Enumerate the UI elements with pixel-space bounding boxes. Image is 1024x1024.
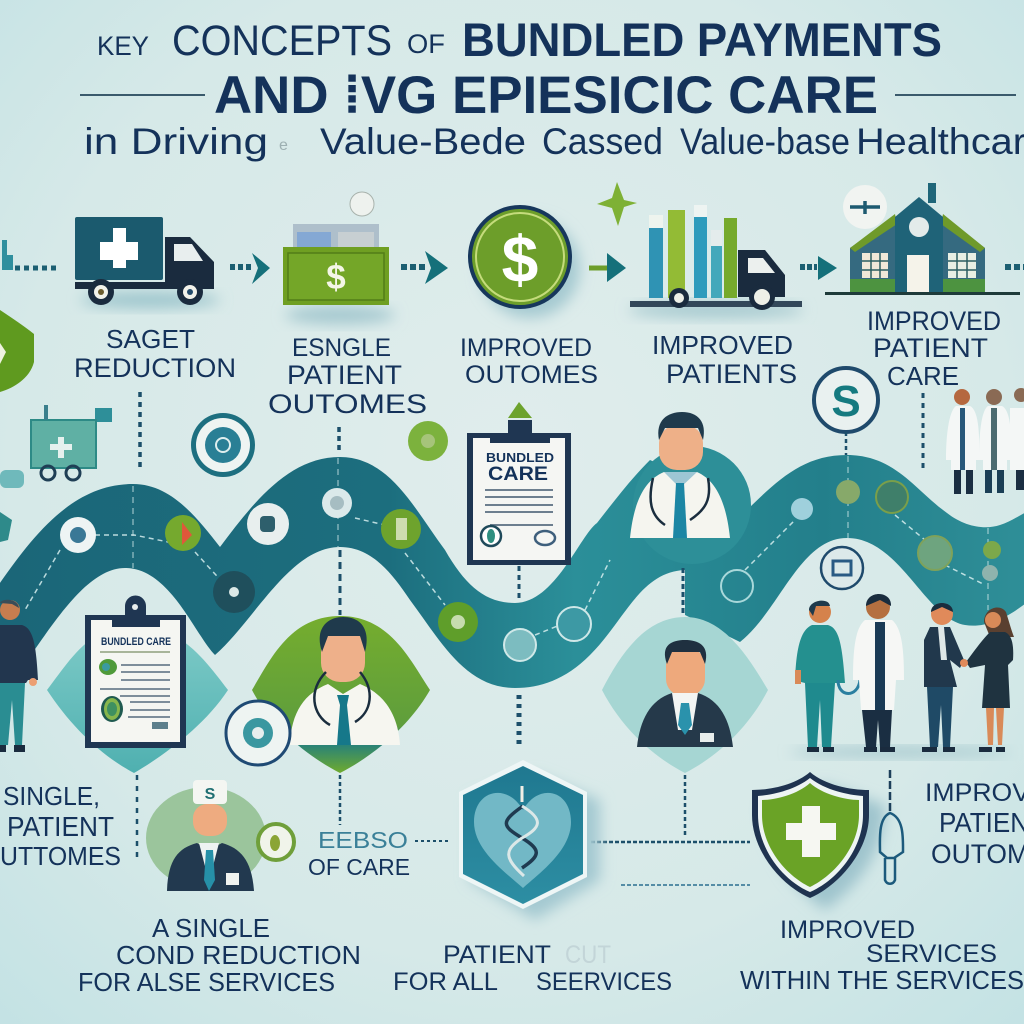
- label: single patient outcomes: [268, 334, 427, 419]
- icon: green shield with cross: [752, 772, 885, 910]
- arrow: bars to house: [800, 256, 837, 280]
- icon: bar chart truck: [628, 205, 804, 318]
- label: a single cond reduction: COND REDUCTION: [116, 940, 361, 970]
- arrow: money to coin: [401, 251, 448, 284]
- label: single patient outcomes: ESNGLE: [292, 334, 391, 362]
- label: improved outcomes: OUTOMES: [465, 361, 598, 389]
- icon: stethoscope: [880, 770, 903, 884]
- figure: scrubs nurse: [795, 601, 845, 752]
- icon: hexagon heart with helix: [459, 760, 600, 920]
- label: improved patient care: CARE: [887, 361, 959, 391]
- icon: man with cap on green disc: [146, 780, 294, 891]
- title: Value-Bede: [320, 121, 526, 162]
- clipboard: bundled care: CARE: [488, 464, 548, 485]
- title: OF: [407, 29, 445, 59]
- label: improved patient outcomes lower right: IMPROV: [925, 779, 1024, 807]
- label: a single cond reduction: A SINGLE: [152, 913, 270, 943]
- title: Value-base: [680, 121, 850, 162]
- title: KEY: [97, 31, 149, 61]
- icon: S badge: [814, 368, 878, 455]
- label: patient for all services: [393, 941, 672, 996]
- label: improved patients: IMPROVED: [652, 330, 793, 360]
- label: a single cond reduction: [78, 913, 361, 997]
- icon: hospital house: [825, 183, 1020, 295]
- dotted connectors: mid rows: [340, 550, 683, 745]
- label: patient for all services: PATIENT: [443, 941, 551, 969]
- label: improved patient care: IMPROVED: [867, 306, 1001, 336]
- label: patient for all services: SEERVICES: [536, 968, 672, 996]
- label: patient for all services: CUT: [565, 941, 611, 969]
- label: improved patients: [652, 330, 797, 389]
- panel: clipboard on teal backdrop: BUNDLED CARE: [101, 636, 171, 648]
- dotted connectors: upper row: [140, 392, 923, 470]
- label: episode of care: OF CARE: [308, 854, 410, 880]
- label: improved services within the services: [740, 916, 1024, 995]
- label: saget reduction: REDUCTION: [74, 353, 236, 383]
- icon: dollar coin: [468, 205, 580, 318]
- label: improved outcomes: [460, 334, 598, 389]
- label: episode of care: [308, 827, 410, 880]
- title: Healthcar: [856, 121, 1024, 162]
- label: improved services within the services: WITHIN THE SERVICES: [740, 965, 1024, 995]
- icon: man with cap on green disc: S: [205, 786, 216, 803]
- figure: woman in dress: [960, 607, 1014, 752]
- icon: green leaf: [597, 182, 637, 226]
- icon: dollar coin: $: [502, 222, 538, 296]
- arrow: truck to money: [230, 253, 270, 284]
- arrow: right edge connector: [1005, 264, 1024, 270]
- panel: man in suit on pale teal backdrop: [602, 617, 768, 773]
- title: Cassed: [542, 121, 663, 162]
- clipboard: bundled care: [467, 402, 571, 565]
- label: single patient outcomes lower left: PATIENT: [7, 811, 114, 842]
- title: [80, 13, 1024, 162]
- icon: left edge tower and dotted connector: [2, 240, 58, 270]
- label: improved patient outcomes lower right: [925, 779, 1024, 869]
- title: AND ⁞VG EPIESICIC CARE: [214, 66, 878, 125]
- label: patient for all services: FOR ALL: [393, 968, 498, 996]
- label: saget reduction: SAGET: [106, 324, 195, 354]
- label: single patient outcomes lower left: SINGLE,: [3, 781, 100, 811]
- icon: doctor on teal circle: [630, 412, 751, 564]
- label: improved patients: PATIENTS: [666, 359, 797, 389]
- label: improved services within the services: SERVICES: [866, 940, 997, 968]
- arrow: coin to bars: [589, 253, 626, 282]
- road: winding care pathway: [0, 455, 1024, 690]
- title: BUNDLED PAYMENTS: [462, 13, 942, 66]
- label: single patient outcomes: PATIENT: [287, 360, 402, 390]
- dotted connectors: lower row: [137, 775, 750, 885]
- panel: clipboard on teal backdrop: [47, 596, 228, 773]
- icon: teal ring badge: [191, 413, 255, 477]
- label: improved patient care: [867, 306, 1001, 391]
- group: three doctors top right: [946, 388, 1024, 494]
- icon: S badge: S: [831, 377, 861, 426]
- label: single patient outcomes lower left: UTTOMES: [0, 841, 121, 871]
- title: in Driving: [84, 121, 268, 162]
- label: improved patient care: PATIENT: [873, 333, 988, 363]
- clipboard: bundled care: BUNDLED: [486, 450, 554, 465]
- title: CONCEPTS: [172, 17, 392, 65]
- icon: ambulance truck: [75, 217, 220, 308]
- icon: small teal ambulance: [0, 405, 112, 542]
- icon: green banknote and folder: $: [326, 258, 346, 297]
- icon: round badge: [226, 701, 290, 765]
- figure: man in suit shaking hands: [922, 603, 964, 752]
- title: e: [279, 137, 288, 154]
- label: saget reduction: [74, 324, 236, 383]
- group: care team people: [790, 594, 1014, 757]
- figure: doctor in white coat: [838, 594, 904, 752]
- label: a single cond reduction: FOR ALSE SERVICES: [78, 967, 335, 997]
- label: episode of care: EEBSO: [318, 827, 408, 853]
- road nodes: [60, 480, 1001, 661]
- label: single patient outcomes: OUTOMES: [268, 389, 427, 419]
- figure: person at left edge: [0, 600, 38, 752]
- icon: green shield at left edge: [0, 310, 34, 392]
- icon: green blob: [408, 421, 448, 461]
- panel: doctor on green backdrop: [252, 616, 430, 773]
- icon: green banknote and folder: [283, 192, 395, 324]
- label: improved outcomes: IMPROVED: [460, 334, 592, 362]
- label: improved services within the services: IMPROVED: [780, 916, 915, 944]
- label: single patient outcomes lower left: [0, 781, 121, 871]
